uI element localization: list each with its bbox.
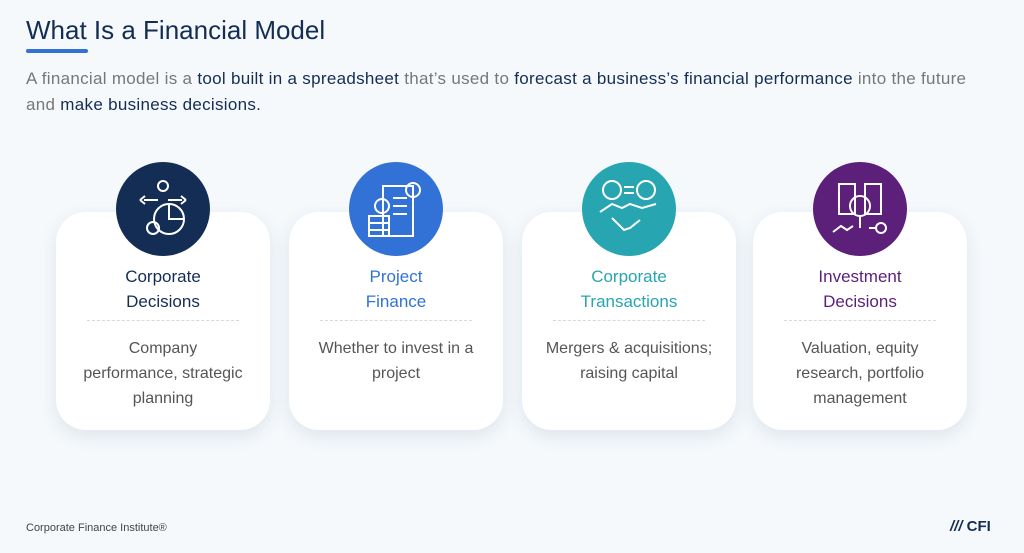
panel: investment decisions: Valuation, equity bbox=[801, 340, 919, 357]
panel: corporate transactions bbox=[518, 162, 740, 440]
title underline bbox=[26, 49, 88, 53]
panel: investment decisions bbox=[750, 162, 970, 440]
logo: CFI: /// CFI bbox=[950, 518, 991, 535]
intro text: and make business decisions. bbox=[26, 95, 261, 114]
panel: corporate decisions bbox=[52, 162, 274, 440]
panel: corporate decisions: Corporate bbox=[125, 267, 201, 286]
intro text: A financial model is a tool built in a spreadsheet that’s used to forecast a business’s financial performance into the future bbox=[26, 69, 966, 88]
icon: project finance bbox=[349, 162, 443, 256]
panel: corporate transactions: Transactions bbox=[581, 292, 677, 311]
panel: project finance bbox=[286, 162, 506, 440]
panel: project finance: project bbox=[372, 365, 420, 382]
panel: project finance: Project bbox=[370, 267, 422, 286]
panel: project finance: Whether to invest in a bbox=[319, 340, 473, 357]
panel: investment decisions: Investment bbox=[818, 267, 902, 286]
panel: corporate decisions: Decisions bbox=[126, 292, 200, 311]
panel: corporate decisions: performance, strategic bbox=[83, 365, 243, 382]
footer credit: Corporate Finance Institute® bbox=[26, 522, 167, 534]
panel: corporate transactions: raising capital bbox=[580, 365, 678, 382]
icon: investment bbox=[813, 162, 907, 256]
panel: investment decisions: Decisions bbox=[823, 292, 897, 311]
panel: corporate transactions: Corporate bbox=[591, 267, 667, 286]
panel: corporate decisions: Company bbox=[129, 340, 197, 357]
title: What Is a Financial Model bbox=[26, 15, 325, 45]
intro text bbox=[26, 69, 966, 114]
icon: decisions bbox=[116, 162, 210, 256]
panel: corporate decisions: planning bbox=[133, 390, 193, 407]
panel: investment decisions: management bbox=[813, 390, 907, 407]
icon: handshake bbox=[582, 162, 676, 256]
panel: investment decisions: research, portfolio bbox=[796, 365, 924, 382]
panel: corporate transactions: Mergers & acquisitions; bbox=[546, 340, 712, 357]
panel: project finance: Finance bbox=[366, 292, 426, 311]
